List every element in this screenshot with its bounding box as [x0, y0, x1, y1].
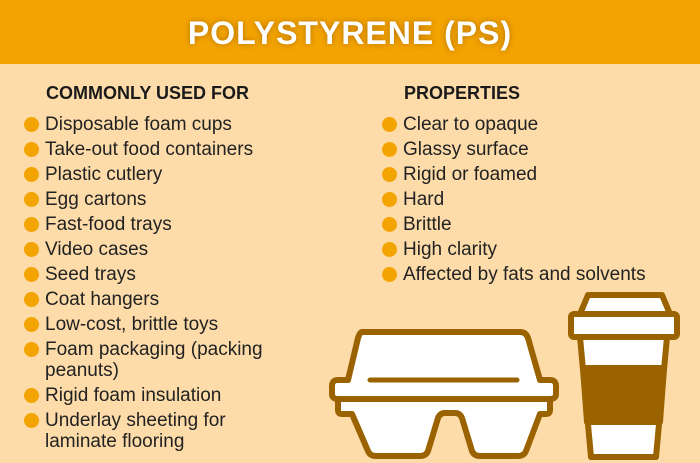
panel: commonly used for: Disposable foam cups	[45, 114, 232, 135]
panel: commonly used for: Coat hangers	[45, 289, 159, 310]
panel: commonly used for: Video cases	[45, 239, 148, 260]
title: POLYSTYRENE (PS)	[188, 15, 512, 51]
panel: properties: PROPERTIES	[404, 83, 520, 103]
panel: properties: Rigid or foamed	[403, 164, 537, 185]
panel: commonly used for	[24, 83, 263, 452]
panel: commonly used for: Take-out food containers	[45, 139, 253, 160]
panel: properties	[382, 83, 646, 285]
icon: coffee cup	[571, 295, 677, 457]
title	[0, 0, 700, 64]
panel: properties: High clarity	[403, 239, 497, 260]
panel: commonly used for: Rigid foam insulation	[45, 385, 221, 406]
panel: commonly used for: Seed trays	[45, 264, 136, 285]
panel: properties: Affected by fats and solvents	[403, 264, 646, 285]
panel: commonly used for: Egg cartons	[45, 189, 146, 210]
icon: egg carton	[332, 332, 556, 456]
panel: commonly used for: Plastic cutlery	[45, 164, 162, 185]
panel: commonly used for: Underlay sheeting for laminate flooring	[45, 410, 226, 452]
panel: commonly used for: Foam packaging (packing peanuts)	[45, 339, 263, 381]
panel: properties: Clear to opaque	[403, 114, 538, 135]
panel: commonly used for: Fast-food trays	[45, 214, 172, 235]
panel: properties: Brittle	[403, 214, 452, 235]
panel: properties: Hard	[403, 189, 444, 210]
panel: commonly used for: COMMONLY USED FOR	[46, 83, 249, 103]
panel: properties: Glassy surface	[403, 139, 529, 160]
panel: commonly used for: Low-cost, brittle toys	[45, 314, 218, 335]
